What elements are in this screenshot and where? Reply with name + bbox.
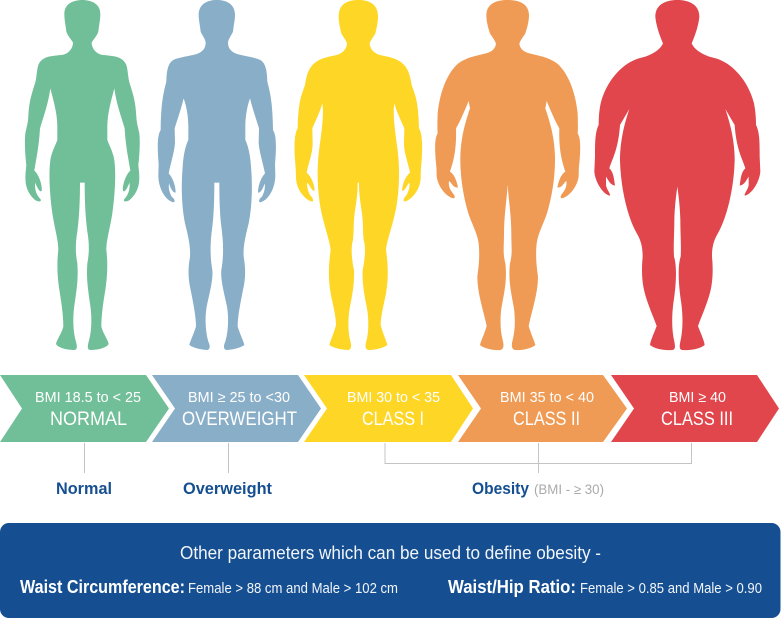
label: obesity: (BMI - ≥ 30): [534, 482, 604, 497]
chevron: overweight: OVERWEIGHT: [182, 408, 297, 430]
label: normal: Normal: [56, 479, 112, 498]
figure: class I obesity silhouette: [295, 0, 422, 350]
connector: overweight: [228, 443, 230, 473]
figure: overweight silhouette: [158, 0, 276, 350]
chevron: normal: BMI 18.5 to < 25: [35, 390, 141, 406]
panel heading: Other parameters which can be used to define obesity -: [180, 543, 601, 563]
chevron: class I: [304, 375, 473, 442]
waist circumference: Female > 88 cm and Male > 102 cm: [188, 581, 398, 597]
chevron: normal: NORMAL: [50, 408, 127, 430]
chevron: normal: [0, 375, 169, 442]
chevron: class II: [458, 375, 627, 442]
chevron: class III: BMI ≥ 40: [669, 390, 726, 406]
waist hip ratio: Waist/Hip Ratio:: [448, 577, 576, 597]
connector: normal: [84, 443, 86, 473]
chevron: class III: CLASS III: [661, 408, 733, 430]
waist hip ratio: [448, 577, 762, 597]
label: overweight: Overweight: [183, 479, 272, 498]
waist hip ratio: Female > 0.85 and Male > 0.90: [580, 581, 762, 597]
chevron: class I: BMI 30 to < 35: [347, 390, 440, 406]
chevron: class I: CLASS I: [362, 408, 424, 430]
label: obesity: Obesity: [472, 479, 529, 498]
waist circumference: Waist Circumference:: [20, 577, 185, 597]
chevron: class II: CLASS II: [513, 408, 580, 430]
label: obesity: [472, 479, 604, 498]
chevron: overweight: [152, 375, 321, 442]
figure: normal weight silhouette: [25, 0, 140, 350]
waist circumference: [20, 577, 398, 597]
bracket: obesity classes: [385, 443, 692, 473]
figure: class II obesity silhouette: [435, 0, 580, 350]
chevron: overweight: BMI ≥ 25 to <30: [188, 390, 290, 406]
figure: class III obesity silhouette: [594, 0, 760, 350]
panel: other parameters: [0, 523, 780, 618]
chevron: class III: [611, 375, 779, 442]
chevron: class II: BMI 35 to < 40: [500, 390, 594, 406]
